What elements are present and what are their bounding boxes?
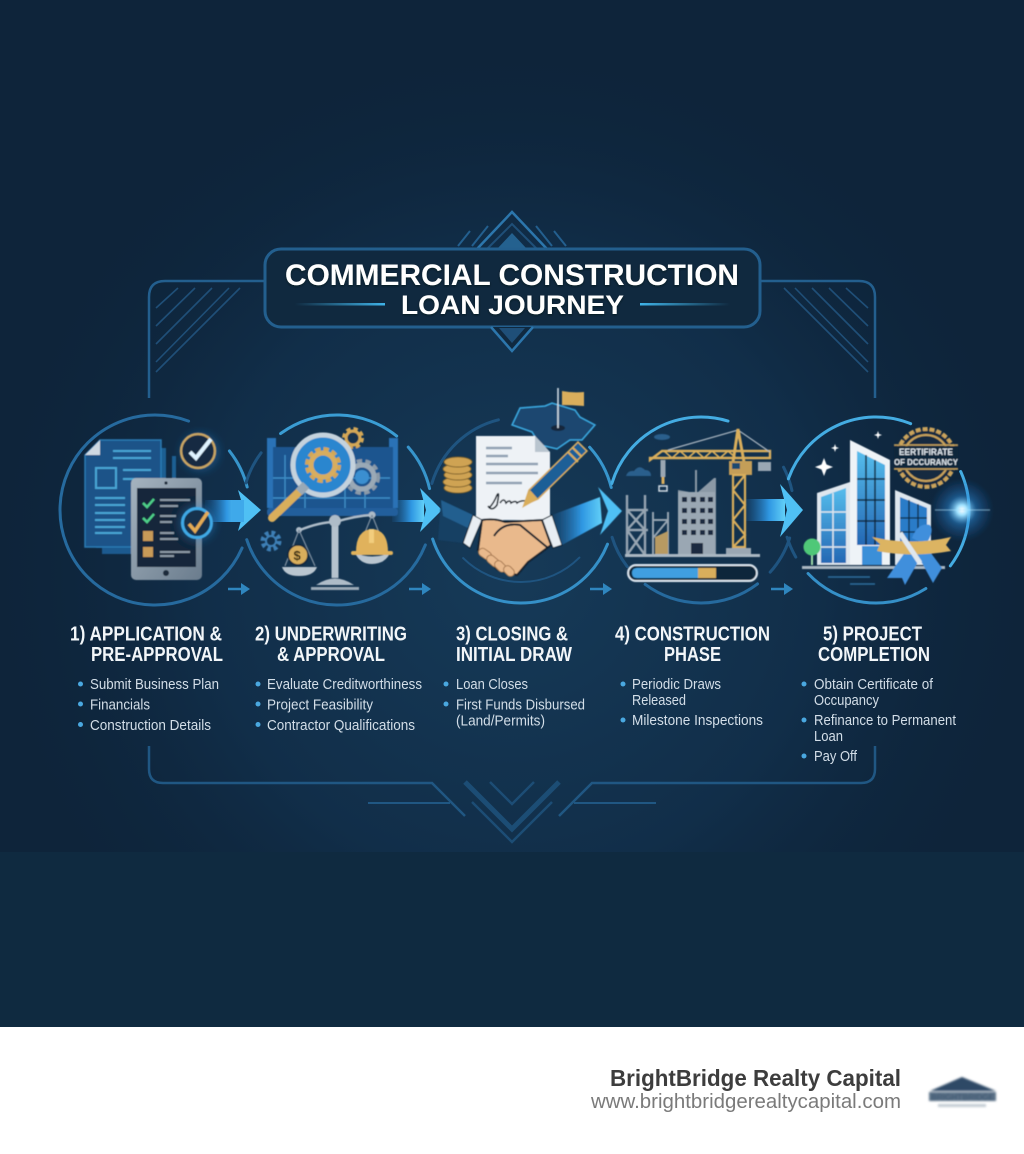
step 4 text: 4) CONSTRUCTION	[615, 624, 770, 646]
step 5 text: Loan	[814, 728, 843, 745]
arrow: step 2 to 3	[392, 488, 442, 532]
certificate badge: OF DCCURANCY	[894, 457, 958, 467]
circle rings for all five steps	[22, 376, 1004, 644]
step 2 text: Contractor Qualifications	[267, 717, 415, 734]
step 5 text: COMPLETION	[818, 644, 930, 666]
icon: underwriting magnifier gears and scale	[263, 430, 398, 590]
company website: www.brightbridgerealtycapital.com	[590, 1091, 901, 1113]
step 1 text: PRE-APPROVAL	[91, 644, 223, 666]
heading: title text: COMMERCIAL CONSTRUCTION	[285, 259, 739, 292]
sparkles	[815, 431, 882, 476]
step 2 text: Evaluate Creditworthiness	[267, 676, 422, 693]
step 4 text: PHASE	[664, 644, 721, 666]
step 2 text: & APPROVAL	[277, 644, 385, 666]
frame: lower bracket and chevron	[149, 746, 875, 842]
step 3 text	[444, 624, 585, 730]
step 3 text: 3) CLOSING &	[456, 624, 568, 646]
step 5 text	[802, 624, 957, 765]
step 5 text: Refinance to Permanent	[814, 712, 957, 729]
step 3 text: (Land/Permits)	[456, 712, 545, 730]
certificate badge	[894, 429, 958, 487]
step 2 text	[255, 624, 422, 734]
frame: upper bracket and hatching	[149, 281, 875, 398]
step 4 text: Periodic Draws	[632, 676, 721, 693]
arrow: step 4 to 5	[745, 484, 803, 537]
small arrows under circles	[228, 583, 793, 595]
step 5 text: Pay Off	[814, 748, 858, 765]
company name: BrightBridge Realty Capital	[610, 1065, 901, 1091]
step 3 text: Loan Closes	[456, 676, 528, 693]
step 1 text: Submit Business Plan	[90, 676, 219, 693]
heading: title text: LOAN JOURNEY	[401, 290, 624, 320]
step 4 text: Milestone Inspections	[632, 712, 763, 729]
arrow: step 1 to 2	[205, 490, 261, 531]
step 1 text: 1) APPLICATION &	[70, 624, 222, 646]
icon: construction crane building progress bar	[625, 429, 771, 581]
progress bar	[628, 565, 757, 581]
icon: closing document handshake pen coins map	[438, 388, 622, 578]
step 2 text: Project Feasibility	[267, 696, 373, 714]
step 4 text	[615, 624, 770, 729]
footer panel	[0, 1027, 1024, 1154]
certificate badge: EERTIFIRATE	[899, 447, 953, 457]
step 4 text: Released	[632, 692, 686, 709]
icon: underwriting magnifier gears and scale: $	[294, 548, 302, 563]
step 1 text: Financials	[90, 696, 150, 714]
logo: BRIGHTBRIDGE	[931, 1093, 995, 1102]
step 3 text: INITIAL DRAW	[456, 644, 572, 666]
step 5 text: 5) PROJECT	[823, 624, 922, 646]
step 2 text: 2) UNDERWRITING	[255, 624, 407, 646]
heading: title text	[285, 259, 739, 320]
step 1 text	[70, 624, 223, 734]
logo	[929, 1077, 996, 1107]
icon: completed building certificate ribbon	[802, 429, 994, 585]
title banner	[265, 212, 760, 351]
icon: application documents and tablet	[85, 434, 218, 580]
step 5 text: Occupancy	[814, 692, 879, 709]
step 3 text: First Funds Disbursed	[456, 696, 585, 714]
step 5 text: Obtain Certificate of	[814, 676, 934, 693]
step 1 text: Construction Details	[90, 717, 211, 734]
